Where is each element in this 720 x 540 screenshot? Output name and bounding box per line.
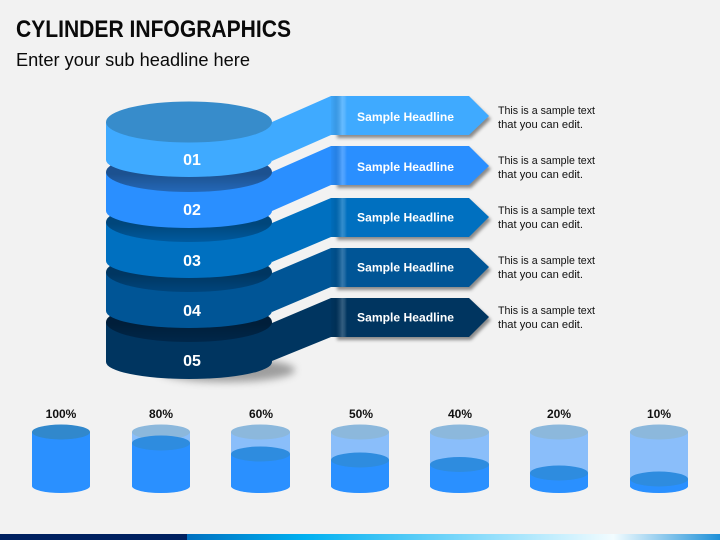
description 05: that you can edit. (498, 319, 583, 331)
description 02 (498, 155, 595, 181)
disk 05: 05 (183, 353, 201, 370)
disk 04: 04 (183, 303, 201, 320)
ribbon 05: Sample Headline (357, 310, 454, 324)
description 02: This is a sample text (498, 155, 595, 167)
disk 03: 03 (183, 253, 201, 270)
gauge 50%: 50% (349, 407, 373, 421)
description 04: that you can edit. (498, 269, 583, 281)
description 05 (498, 305, 595, 331)
gauge 10%: 10% (647, 407, 671, 421)
description 05: This is a sample text (498, 305, 595, 317)
description 03: This is a sample text (498, 205, 595, 217)
disk 02 (106, 152, 272, 228)
gauge 40% (430, 407, 489, 493)
ribbon 02 (272, 146, 491, 211)
gauge 40%: 40% (448, 407, 472, 421)
ribbon 04: Sample Headline (357, 260, 454, 274)
description 03: that you can edit. (498, 219, 583, 231)
gauge 20%: 20% (547, 407, 571, 421)
gauge 50% (331, 407, 389, 493)
ribbon 05 (272, 298, 491, 361)
disk 02: 02 (183, 202, 201, 219)
cylinder stack (106, 96, 491, 382)
disk 01 (106, 102, 272, 177)
drop shadow under stack (157, 358, 295, 382)
description 04: This is a sample text (498, 255, 595, 267)
disk 01: 01 (183, 152, 201, 169)
disk 04 (106, 252, 272, 328)
footer bar (0, 534, 720, 540)
description 04 (498, 255, 595, 281)
ribbon 01: Sample Headline (357, 110, 454, 124)
gauge 60% (231, 407, 290, 493)
ribbon 04 (272, 248, 491, 312)
gauge 80%: 80% (149, 407, 173, 421)
description 02: that you can edit. (498, 169, 583, 181)
ribbon 02: Sample Headline (357, 160, 454, 174)
ribbon 01 (272, 96, 491, 161)
subtitle: Enter your sub headline here (16, 50, 250, 70)
gauge 100% (32, 407, 90, 493)
disk 03 (106, 202, 272, 278)
disk 05 (106, 302, 272, 379)
description 01: This is a sample text (498, 105, 595, 117)
description 03 (498, 205, 595, 231)
description 01 (498, 105, 595, 131)
gauge 20% (530, 407, 588, 493)
gauge 10% (630, 407, 688, 493)
title: CYLINDER INFOGRAPHICS (16, 16, 291, 43)
ribbon 03 (272, 198, 491, 262)
gauge 100%: 100% (46, 407, 77, 421)
description 01: that you can edit. (498, 119, 583, 131)
gauge 80% (132, 407, 190, 493)
ribbon 03: Sample Headline (357, 210, 454, 224)
gauge 60%: 60% (249, 407, 273, 421)
